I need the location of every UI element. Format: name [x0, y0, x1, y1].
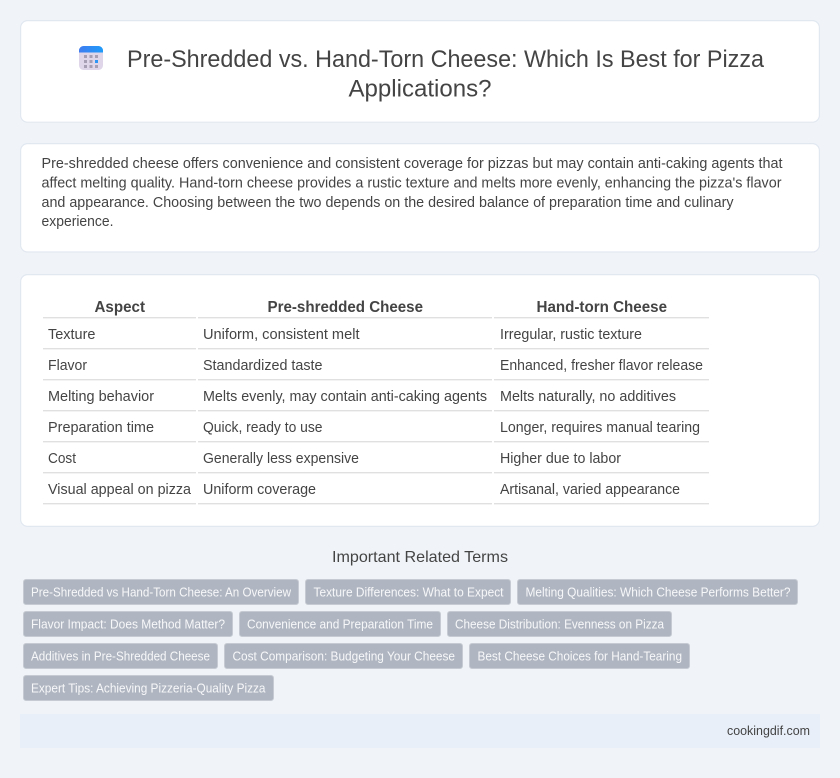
row: melting behavior: Melts naturally, no additives: [500, 388, 676, 405]
row: preparation time: Quick, ready to use: [203, 419, 322, 436]
row: melting behavior: Melts evenly, may contain anti-caking agents: [203, 388, 487, 405]
tag: [224, 644, 462, 668]
row: texture: [48, 326, 642, 343]
tag: Cheese Distribution: Evenness on Pizza: [455, 616, 665, 632]
table header: [94, 299, 667, 316]
row: melting behavior: Melting behavior: [48, 388, 154, 405]
panel: header: [21, 21, 819, 122]
text block: description: affect melting quality. Hand-torn cheese provides a rustic texture and melts more evenly, enhancing the pizza's flavor: [42, 174, 782, 192]
panel: comparison table: [21, 275, 819, 526]
tag: [24, 580, 298, 604]
tag: Additives in Pre-Shredded Cheese: [31, 648, 210, 664]
row: flavor: Flavor: [48, 357, 87, 374]
row: cost: Cost: [48, 450, 77, 467]
tag: Pre-Shredded vs Hand-Torn Cheese: An Overview: [31, 584, 292, 600]
text block: description: Pre-shredded cheese offers convenience and consistent coverage for pizzas but may contain anti-caking agents that: [42, 155, 783, 172]
row: preparation time: Preparation time: [48, 419, 154, 436]
row: texture: Irregular, rustic texture: [500, 326, 642, 343]
heading: related terms: Important Related Terms: [332, 549, 508, 566]
row: visual appeal: [48, 481, 680, 498]
text block: description: and appearance. Choosing between the two depends on the desired balance of preparation time and culinary: [42, 194, 734, 211]
row: texture: Texture: [48, 326, 96, 343]
row: preparation time: Longer, requires manual tearing: [500, 419, 700, 436]
panel: description: [21, 144, 819, 252]
row: preparation time: [48, 419, 700, 436]
title: Pre-Shredded vs. Hand-Torn Cheese: Which Is Best for Pizza: [127, 46, 765, 73]
tag: [448, 612, 672, 636]
tag: [518, 580, 798, 604]
table header: Pre-shredded Cheese: [268, 299, 423, 316]
row: cost: [48, 450, 621, 467]
footer: cookingdif.com: [727, 723, 810, 738]
tag: [306, 580, 510, 604]
tag: Flavor Impact: Does Method Matter?: [31, 616, 225, 632]
row: visual appeal: Artisanal, varied appearance: [500, 481, 680, 498]
row: cost: Generally less expensive: [203, 450, 359, 467]
row: flavor: Enhanced, fresher flavor release: [500, 357, 703, 374]
title: Applications?: [348, 76, 492, 102]
table header: Aspect: [94, 299, 146, 316]
title: [127, 46, 765, 102]
tag: [24, 612, 232, 636]
tag: Expert Tips: Achieving Pizzeria-Quality Pizza: [31, 680, 266, 696]
row: visual appeal: Visual appeal on pizza: [48, 481, 192, 498]
footer: [20, 714, 820, 748]
tag: Texture Differences: What to Expect: [314, 584, 504, 600]
tag: Convenience and Preparation Time: [247, 616, 433, 632]
row: visual appeal: Uniform coverage: [203, 481, 316, 498]
table header: Hand-torn Cheese: [536, 299, 667, 316]
tag: [470, 644, 690, 668]
row: flavor: [48, 357, 703, 374]
text block: description: [42, 155, 783, 230]
tag list: related terms: [24, 580, 798, 700]
tag: [24, 676, 274, 700]
row: texture: Uniform, consistent melt: [203, 326, 360, 343]
row: melting behavior: [48, 388, 676, 405]
tag: Cost Comparison: Budgeting Your Cheese: [232, 648, 455, 664]
tag: Melting Qualities: Which Cheese Performs Better?: [526, 584, 790, 600]
tag: [240, 612, 440, 636]
icon: calendar: [79, 46, 103, 70]
tag: [24, 644, 218, 668]
tag: Best Cheese Choices for Hand-Tearing: [478, 648, 682, 664]
text block: description: experience.: [42, 213, 114, 230]
row: flavor: Standardized taste: [203, 357, 322, 374]
row: cost: Higher due to labor: [500, 450, 621, 467]
